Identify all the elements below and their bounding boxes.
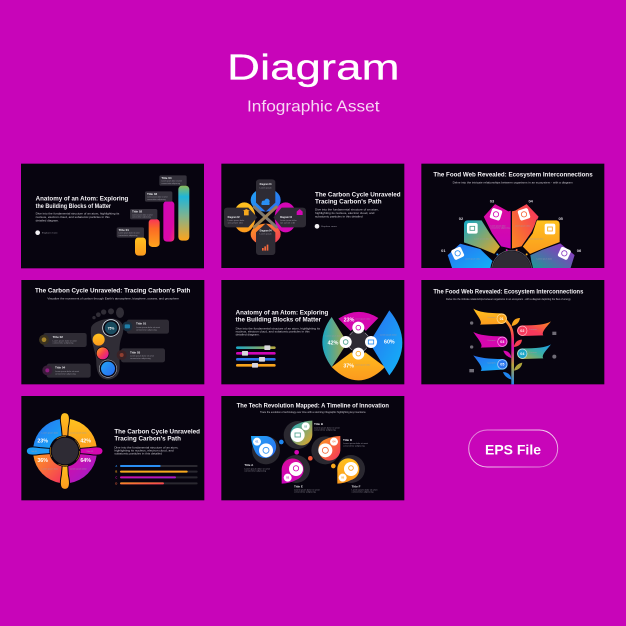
leaf 03	[473, 332, 508, 348]
petal labels: Title 02	[86, 450, 93, 453]
percentages: Lorem ipsum dolor	[70, 431, 87, 434]
percentages: Lorem ipsum dolor	[380, 333, 397, 336]
label cards: Lorem ipsum dolor sit amet	[119, 232, 140, 235]
wheel chart	[322, 310, 402, 380]
percentages: 36%	[37, 458, 48, 464]
node B: 02	[304, 424, 308, 428]
panel heading: the Building Blocks of Matter	[36, 203, 111, 210]
bar chart: B	[115, 470, 117, 474]
node A: 01	[256, 440, 259, 444]
label cards: Lorem ipsum dolor sit amet	[161, 180, 182, 183]
small captions: Lorem ipsum dolor	[474, 238, 490, 241]
panel: food web tree	[421, 280, 604, 385]
callout cards: consectetur adipiscing	[53, 342, 73, 345]
body text	[236, 327, 321, 337]
panel heading	[236, 309, 328, 324]
label cards: consectetur adipiscing	[119, 234, 137, 237]
node D	[311, 436, 340, 464]
body text: subatomic particles in this detailed	[315, 214, 363, 218]
node labels: Lorem ipsum dolor sit amet	[343, 442, 368, 445]
label cards: consectetur adipiscing	[147, 198, 166, 201]
label cards: Lorem ipsum dolor sit amet	[147, 196, 168, 199]
panel heading: The Carbon Cycle Unraveled: Tracing Carbon's Path	[35, 289, 191, 295]
donut chart	[33, 419, 97, 483]
node labels: Lorem ipsum dolor sit amet	[244, 467, 270, 470]
title: Diagram: Diagram	[227, 46, 400, 88]
subtitle: Visualize the movement of carbon through Earth's atmosphere, biosphere, oceans, and geosphere	[47, 297, 180, 301]
callout cards: Lorem ipsum dolor sit amet	[130, 355, 154, 358]
panel heading: Tracing Carbon's Path	[315, 199, 382, 206]
body text: detailed diagram.	[36, 218, 59, 222]
subtitle: Delve into the intricate relationships between organisms in an ecosystem - with a diagram depicting the flow of energy	[446, 297, 571, 301]
leaf 03: Lorem	[488, 339, 496, 342]
icon: box	[243, 209, 250, 215]
numbers: 01	[441, 248, 446, 253]
leaf 04	[517, 344, 551, 359]
small captions: Lorem ipsum dolor	[528, 238, 544, 241]
small captions: Lorem ipsum dolor	[490, 224, 506, 227]
node E: 03	[286, 476, 290, 480]
percentages: 23%	[344, 318, 355, 324]
percentages: 42%	[80, 439, 91, 445]
callout cards: Lorem ipsum dolor sit amet	[53, 339, 77, 342]
icons	[340, 322, 377, 360]
percentages: 37%	[343, 363, 354, 369]
label cards: Title 03	[147, 192, 158, 196]
card labels	[228, 182, 297, 235]
panel: carbon cycle cross	[221, 164, 404, 268]
card labels: Lorem ipsum	[260, 186, 272, 189]
panel heading	[36, 196, 128, 210]
panel heading: The Food Web Revealed: Ecosystem Interconnections	[433, 289, 584, 295]
connector dots	[279, 440, 336, 468]
node A	[251, 436, 280, 464]
panel: food web fan	[421, 164, 604, 268]
label cards: Title 04	[161, 176, 172, 180]
leaf 02: Lorem	[529, 328, 537, 331]
small captions: Lorem ipsum dolor	[465, 258, 481, 261]
body text: Dive into the fundamental structure of an atom, highlighting its	[236, 327, 321, 331]
step circles: 75%	[108, 326, 114, 330]
node labels: consectetur adipiscing	[314, 429, 336, 432]
panel: tech timeline	[221, 396, 404, 500]
bullet	[35, 230, 59, 235]
node labels: Title F	[352, 484, 361, 488]
card labels: sit amet elit	[228, 221, 243, 224]
body text: detailed diagram.	[236, 333, 260, 337]
numbers: 06	[577, 248, 582, 253]
panel heading: The Food Web Revealed: Ecosystem Interconnections	[433, 173, 593, 179]
panel: atom bars	[21, 164, 204, 268]
callout cards: Lorem ipsum dolor sit amet	[55, 370, 79, 373]
node labels: consectetur adipiscing	[294, 491, 316, 494]
callout cards: Lorem ipsum dolor sit amet	[136, 326, 160, 329]
body text: highlighting its nucleus, electron cloud, and	[315, 211, 375, 215]
body text: nucleus, electron cloud, and subatomic particles in this	[236, 330, 310, 334]
card labels: sit amet elit	[280, 221, 296, 224]
step circles	[93, 320, 119, 377]
body text	[36, 211, 120, 222]
node labels: consectetur adipiscing	[343, 444, 365, 447]
icon: cloud	[261, 199, 270, 205]
node labels: Title A	[244, 463, 254, 467]
card labels: Diagram 03	[280, 215, 292, 219]
bullet	[315, 224, 338, 229]
callout cards: consectetur adipiscing	[136, 328, 157, 331]
node labels: Lorem ipsum dolor sit amet	[352, 488, 378, 491]
label cards: consectetur adipiscing	[161, 182, 180, 185]
card labels: Diagram 02	[228, 215, 240, 219]
bar chart	[135, 186, 189, 256]
node D: 04	[333, 440, 336, 444]
leaf 02: 02	[520, 329, 524, 333]
percentages: Lorem ipsum dolor	[355, 317, 371, 320]
bullet: Explore more	[42, 231, 59, 234]
label cards: Lorem ipsum dolor sit amet	[132, 213, 153, 216]
bullet: Explore more	[321, 225, 338, 228]
percentages: Lorem ipsum dolor	[42, 431, 59, 434]
node labels: Title E	[294, 484, 303, 488]
label cards	[117, 175, 187, 238]
node F: 05	[341, 476, 345, 480]
percentages: Lorem ipsum dolor	[355, 363, 371, 366]
center hub	[49, 435, 81, 467]
node labels: Lorem ipsum dolor sit amet	[314, 426, 340, 429]
node labels: consectetur adipiscing	[244, 470, 266, 473]
bar chart: A	[115, 464, 117, 468]
icon: chart	[262, 245, 268, 251]
panel: carbon cycle donut	[21, 396, 204, 500]
node labels	[244, 422, 378, 494]
card labels: Diagram 04	[260, 228, 272, 232]
label cards: Title 01	[119, 228, 129, 232]
small captions: Lorem ipsum dolor	[537, 258, 552, 261]
label cards: Title 02	[132, 210, 143, 214]
numbers: 04	[528, 199, 534, 204]
panel heading	[114, 428, 200, 443]
leaf 04: Lorem	[529, 351, 537, 354]
numbers	[441, 199, 582, 253]
card labels: Lorem ipsum dolor	[280, 219, 297, 222]
tree stem	[504, 319, 513, 385]
numbers: 05	[558, 216, 564, 221]
percentages	[326, 317, 397, 369]
bar chart: C	[115, 475, 117, 479]
panel heading: Anatomy of an Atom: Exploring	[36, 196, 128, 203]
panel heading	[315, 191, 401, 206]
body text: subatomic particles in this detailed	[114, 451, 163, 455]
sliders	[236, 345, 276, 368]
panel heading: Anatomy of an Atom: Exploring	[236, 309, 328, 316]
panel heading: the Building Blocks of Matter	[236, 317, 322, 324]
node labels: consectetur adipiscing	[352, 491, 373, 494]
callout cards: consectetur adipiscing	[130, 357, 151, 360]
small captions: Lorem ipsum dolor	[515, 224, 531, 227]
subtitle: Trace the evolution of technology over time with a stunning infographic highlighting key inventions	[260, 410, 366, 414]
card labels: Lorem ipsum dolor	[228, 219, 245, 222]
footprint	[91, 307, 124, 379]
bar chart	[115, 464, 198, 485]
small captions: consectetur adipiscing	[490, 227, 510, 230]
panel: atom wheel	[221, 280, 404, 384]
percentages: 60%	[384, 339, 395, 345]
subtitle: Delve into the intricate relationships between organisms in an ecosystem - with a diagram	[453, 181, 574, 185]
hub	[340, 323, 376, 359]
node labels: Lorem ipsum dolor sit amet	[294, 488, 320, 491]
callout cards: Title 02	[53, 335, 63, 339]
callout cards: Title 04	[55, 366, 66, 370]
side icons	[469, 321, 556, 372]
node labels: Title B	[314, 422, 324, 426]
percentages: Lorem ipsum dolor	[326, 335, 341, 338]
percentages: Lorem ipsum dolor	[70, 467, 87, 470]
callout cards: consectetur adipiscing	[55, 372, 76, 375]
colored petals	[233, 188, 297, 245]
small captions	[465, 224, 552, 261]
panel heading: The Tech Revolution Mapped: A Timeline of Innovation	[237, 403, 389, 409]
leaf 02	[517, 321, 551, 336]
central hub	[490, 249, 533, 268]
body text: Dive into the fundamental structure of an atom,	[315, 208, 379, 212]
node E	[282, 455, 310, 484]
fan chart	[447, 204, 575, 270]
callout cards	[39, 320, 169, 378]
petal labels	[31, 450, 93, 453]
badge: EPS File	[469, 430, 558, 467]
body text	[315, 208, 379, 218]
leaf 04: 04	[520, 352, 525, 356]
card labels: Lorem ipsum	[260, 232, 272, 235]
body text: Dive into the fundamental structure of an atom, highlighting its	[36, 211, 120, 215]
leaf 01: 01	[500, 317, 504, 321]
pointer petals	[26, 413, 103, 489]
petal labels: Title 01	[31, 450, 37, 453]
icons	[451, 208, 571, 260]
leaf 01	[473, 309, 507, 325]
body text: Dive into the fundamental structure of an atom,	[114, 445, 179, 449]
panel heading: The Carbon Cycle Unraveled	[114, 428, 200, 435]
leaf 05: 05	[500, 363, 504, 367]
subtitle: Infographic Asset: Infographic Asset	[247, 98, 380, 116]
numbers: 02	[459, 216, 464, 221]
callout cards: Title 01	[136, 322, 147, 326]
percentages: Lorem ipsum dolor	[42, 467, 59, 470]
card labels: Diagram 01	[260, 182, 272, 186]
body text: nucleus, electron cloud, and subatomic particles in this	[36, 215, 110, 219]
leaf 05	[473, 355, 508, 371]
node B	[284, 421, 312, 449]
label cards: consectetur adipiscing	[132, 216, 151, 219]
percentages	[37, 431, 91, 470]
node F	[337, 455, 365, 484]
leaf 03: 03	[500, 340, 504, 344]
node labels: Title D	[343, 438, 353, 442]
leaf 01: Lorem	[488, 316, 496, 319]
numbers: 03	[490, 199, 495, 204]
leaf 05: Lorem	[488, 361, 496, 364]
body text: highlighting its nucleus, electron cloud, and	[114, 448, 174, 452]
callout cards: Title 03	[130, 350, 141, 354]
percentages: 23%	[37, 439, 48, 445]
panel heading: Tracing Carbon's Path	[114, 436, 181, 443]
small leaves	[503, 318, 522, 379]
diagram cards	[224, 179, 306, 255]
percentages: 64%	[80, 458, 91, 464]
percentages: 42%	[328, 341, 339, 347]
panel heading: The Carbon Cycle Unraveled	[315, 191, 401, 198]
badge: EPS File: EPS File	[485, 442, 541, 458]
bar chart: D	[115, 481, 117, 485]
icon: home	[297, 209, 303, 215]
center cross	[254, 207, 276, 227]
body text	[114, 445, 179, 455]
panel: carbon footprint	[21, 280, 204, 384]
